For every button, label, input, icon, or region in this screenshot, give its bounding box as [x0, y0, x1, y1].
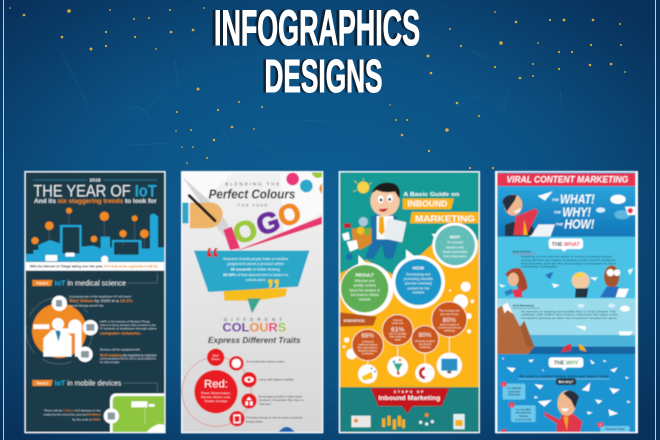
hero: the what why how: THE	[554, 211, 562, 215]
section: the why: It is relatively	[507, 387, 522, 390]
section: the why: Catchy the	[508, 390, 521, 393]
intro strip	[26, 262, 164, 271]
statistic bubbles	[352, 302, 467, 365]
section: the why: Sticky Bote	[508, 394, 521, 397]
section: viral marketing	[497, 298, 635, 354]
bubble: result: the brand's official	[351, 293, 379, 297]
steps of inbound marketing	[340, 387, 479, 432]
section: IoT in mobile devices	[32, 378, 164, 432]
statistics ribbon: STATISTICS:	[343, 319, 365, 323]
red traits diagram: Promotes energy so can be used to promote	[246, 416, 303, 420]
section: IoT in medical science	[26, 273, 157, 364]
section: IoT in mobile devices: Trend 2	[36, 381, 48, 385]
section: the why: Sharing	[519, 415, 528, 418]
section: the why: But why?	[559, 380, 573, 384]
section: the what: that benefits and aid the associated companies in their	[521, 261, 616, 265]
red traits diagram: colour with highest visibility	[259, 378, 294, 382]
red traits diagram: Other	[212, 353, 219, 357]
hero: the what why how: HOW!	[564, 218, 594, 232]
statistic bubbles: The message over	[439, 310, 460, 313]
bubble: how: Developing and	[406, 272, 431, 276]
section: the what: across plexithe and pages of various social network mediums,	[521, 258, 616, 262]
statistics ribbon	[340, 312, 377, 327]
section: IoT in mobile devices: There will be 5 Billion IoT devices in the	[44, 408, 101, 412]
section: IoT in medical science: for data storage.	[100, 360, 120, 364]
decorative white bubbles	[343, 282, 474, 359]
red traits diagram: Names	[211, 357, 221, 361]
statistic bubbles: leads cost	[392, 322, 404, 325]
section: IoT in medical science: communications and to link to cloud platforms	[100, 357, 157, 361]
heading: different colours express different traits: COLOURS	[222, 320, 286, 334]
heading: a basic guide on inbound marketing	[403, 192, 479, 224]
callout: research quote banner: Research reveals people make an intuitive	[223, 257, 288, 261]
bubble: why: leads and leads	[443, 250, 467, 254]
logo letters OGO	[229, 197, 305, 251]
bubble: how: content for the	[407, 286, 430, 290]
callout: research quote banner: “	[205, 242, 220, 275]
section: IoT in mobile devices: IoT in mobile devices	[55, 378, 122, 387]
red traits diagram: An emotionally intense colour	[246, 360, 285, 364]
statistic icons	[358, 353, 462, 384]
heading: different colours express different traits: DIFFERENT	[224, 317, 286, 322]
red traits diagram: 'Click Here'	[259, 402, 272, 406]
title	[211, 0, 420, 102]
steps of inbound marketing: STEPS OF	[394, 390, 425, 394]
section: the why	[497, 354, 635, 432]
title banner: VIRAL CONTENT MARKETING	[506, 175, 628, 185]
steps of inbound marketing: Inbound Marketing	[378, 396, 441, 402]
bubble: result: quality content	[353, 284, 376, 288]
title line: DESIGNS: DESIGNS	[262, 50, 380, 102]
callout: research quote banner: 90 seconds of initial viewing.	[231, 268, 281, 272]
section: IoT in medical science: IoMT or the Internet of Medical Things	[100, 320, 151, 324]
city skyline with icons	[26, 208, 164, 263]
statistic bubbles: than outbound	[390, 336, 406, 339]
statistic bubbles: conventional inbound	[438, 327, 462, 330]
statistic bubbles: of inbound	[362, 340, 374, 343]
section: the why: THE WHY	[554, 361, 579, 367]
title banner	[497, 173, 635, 192]
statistic bubbles: leads	[395, 339, 401, 342]
section: IoT in medical science: Devices will be equipped with	[100, 348, 141, 352]
statistic bubbles: 61%	[391, 326, 404, 333]
section: IoT in medical science: Trend 1	[36, 281, 48, 285]
section: the why: 12	[599, 423, 602, 427]
red traits diagram: energy drinks	[246, 419, 263, 423]
red traits diagram: Passion, Desire, Love,	[201, 395, 231, 399]
section: viral marketing: An attempt of reaping the benefits from a Viral Content. The	[521, 309, 617, 313]
section: the why: 2	[511, 403, 513, 407]
section: IoT in medical science: IoT in medical science	[55, 278, 126, 287]
bubble: how: promoting valuable	[404, 277, 433, 281]
bubble: how	[392, 249, 445, 309]
section: the why: Discussion Starts	[605, 428, 625, 431]
heading: blending the perfect colours: Perfect Colours	[209, 187, 295, 202]
callout: research quote banner	[194, 242, 309, 313]
section: the why: We share a content million times and make it viral.	[519, 374, 609, 378]
hero: the what why how: THE	[556, 223, 564, 227]
bubble: result: website	[359, 298, 371, 302]
heading: different colours express different traits: Express Different Traits	[208, 335, 301, 345]
bubble: how: (service-oriented)	[405, 282, 432, 286]
numbered reasons	[503, 384, 525, 400]
title line: INFOGRAPHICS	[211, 0, 420, 56]
heading: the year of IoT: And its six staggering trends to look for	[34, 198, 157, 205]
title line: DESIGNS	[262, 50, 382, 102]
heading: a basic guide on inbound marketing: INBOUND	[407, 200, 448, 209]
red traits diagram: Danger, Courage	[205, 399, 228, 403]
bubble: result: Effective and	[355, 279, 375, 283]
heading: a basic guide on inbound marketing: MARKETING	[415, 214, 475, 224]
statistic bubbles: 80%	[443, 317, 456, 324]
logo letters OGO: G	[253, 205, 284, 242]
section: the why: well delivered,	[515, 412, 532, 415]
panel: perfect colours infographic	[181, 171, 323, 433]
bubble: result	[340, 255, 393, 316]
section: IoT in medical science: Increasing rate of the healthcare IoT will reach	[69, 294, 132, 298]
section: viral marketing: Viral Marketing	[513, 304, 534, 308]
callout: research quote banner: 62-90% of that assessment is based on	[223, 273, 288, 277]
section: the what	[497, 237, 635, 298]
bubble: how: HOW	[413, 265, 425, 270]
section: IoT in medical science: annual average growth rate.	[69, 303, 105, 307]
statistic bubbles: Inbound	[393, 319, 403, 322]
bubble: result: direct the readers to	[349, 288, 380, 292]
section: the what: Neat Content	[513, 249, 531, 253]
statistic bubbles: 68%	[361, 333, 374, 340]
statistic bubbles: 80%	[419, 332, 432, 339]
statistic bubbles: is effective	[362, 352, 374, 355]
bubble: why: into customers	[444, 255, 467, 259]
callout: research quote banner: colours alone	[246, 278, 266, 282]
heading: blending the perfect colours: BLENDING THE	[225, 182, 281, 187]
statistic bubbles: less on average	[389, 333, 407, 336]
red traits diagram: Encourages people to make Quick	[259, 394, 303, 398]
statistic bubbles: blogging strategy	[358, 349, 378, 352]
panel: viral content marketing infographic	[495, 171, 638, 433]
businessman character	[342, 178, 407, 260]
hero: the what why how: WHAT!	[560, 192, 595, 206]
section: viral marketing: investment growing up when the investment remains the same.	[521, 316, 618, 320]
title line: INFOGRAPHICS: INFOGRAPHICS	[211, 0, 417, 56]
heading: the year of IoT	[33, 177, 157, 205]
statistic bubbles: marketing	[444, 330, 455, 333]
statistic bubbles: via inbound	[419, 343, 432, 346]
section: the what: Anything on the Internet which is worthy of being shared	[521, 255, 612, 259]
section: IoT in medical science: IT network of healthcare through online	[100, 326, 157, 330]
bubble: how: readers	[412, 291, 424, 295]
hero: the what why how: THE	[552, 198, 560, 202]
title line: INFOGRAPHICS: INFOGRAPHICS	[214, 0, 420, 56]
intro strip: With the Internet of Things taking over the year, let's look at the segments it will hit.	[30, 264, 158, 268]
statistic bubbles: of brands respond	[415, 340, 436, 343]
callout: research quote banner: judgement about a product within	[226, 262, 284, 266]
section: the what: marketing strategies.	[521, 265, 559, 269]
heading: blending the perfect colours: FOR YOUR	[238, 203, 269, 207]
statistic bubbles: that organisation's	[358, 346, 378, 349]
section: the what: THE WHAT	[552, 242, 580, 248]
statistic bubbles: marketing	[420, 346, 431, 349]
section: the why: 1	[503, 383, 505, 387]
section: IoT in medical science: Wi-Fi enabling the machine to machine	[100, 353, 157, 357]
section: IoT in mobile devices: market by the end of this year and 25 Billion	[43, 412, 101, 416]
red traits diagram: Red:	[204, 378, 228, 390]
decorative colour dots	[286, 172, 322, 194]
callout: research quote banner: ”	[266, 274, 281, 307]
section: the why: It is incredibly	[516, 408, 532, 411]
hero: the what why how	[497, 186, 635, 237]
bubble: result: RESULT	[356, 272, 374, 277]
heading: the year of IoT: THE YEAR OF IoT	[33, 182, 157, 201]
red traits diagram	[182, 349, 304, 432]
heading: blending the perfect colours	[209, 182, 295, 207]
hero: the what why how: WHY!	[562, 206, 591, 220]
statistic bubbles: marketers believe	[358, 343, 378, 346]
statistic bubbles: what 3 months of	[440, 324, 459, 327]
bubble: why	[432, 223, 478, 268]
heading: the year of IoT: 2018	[89, 177, 101, 183]
hand with brush drawing logo	[182, 196, 322, 250]
heading: different colours express different traits	[208, 317, 301, 345]
section: IoT in medical science: $117 billion by 2020 in a 15.1%	[69, 299, 134, 303]
section: IoT in medical science: computer networks.	[100, 332, 141, 336]
panel: year of IoT infographic	[24, 171, 166, 433]
bubble: why: To convert	[447, 241, 463, 245]
panel: inbound marketing infographic	[339, 171, 480, 433]
title line: DESIGNS: DESIGNS	[264, 50, 382, 102]
heading: a basic guide on inbound marketing: A Basic Guide on	[403, 192, 459, 198]
section: IoT in mobile devices: by the end of 2020.	[72, 418, 101, 422]
section: the why: across me File	[515, 418, 532, 421]
section: viral marketing: marketer, with fruitful viral content, witnesses the value of the	[521, 313, 618, 317]
logo letters OGO: O	[229, 213, 262, 251]
logo letters OGO: O	[274, 197, 305, 234]
paper planes	[502, 357, 631, 416]
red traits diagram: Power, Determination,	[201, 391, 231, 395]
section: IoT in medical science: refers to those devices that connect to the	[100, 323, 157, 327]
red traits diagram: Decisions; Remember 'Buy Now' or	[259, 398, 304, 402]
character throwing plane	[544, 412, 582, 432]
bubble: why: readers into	[446, 245, 464, 249]
bubble: why: WHY	[450, 234, 461, 239]
statistic bubbles: your team brings	[440, 313, 459, 316]
